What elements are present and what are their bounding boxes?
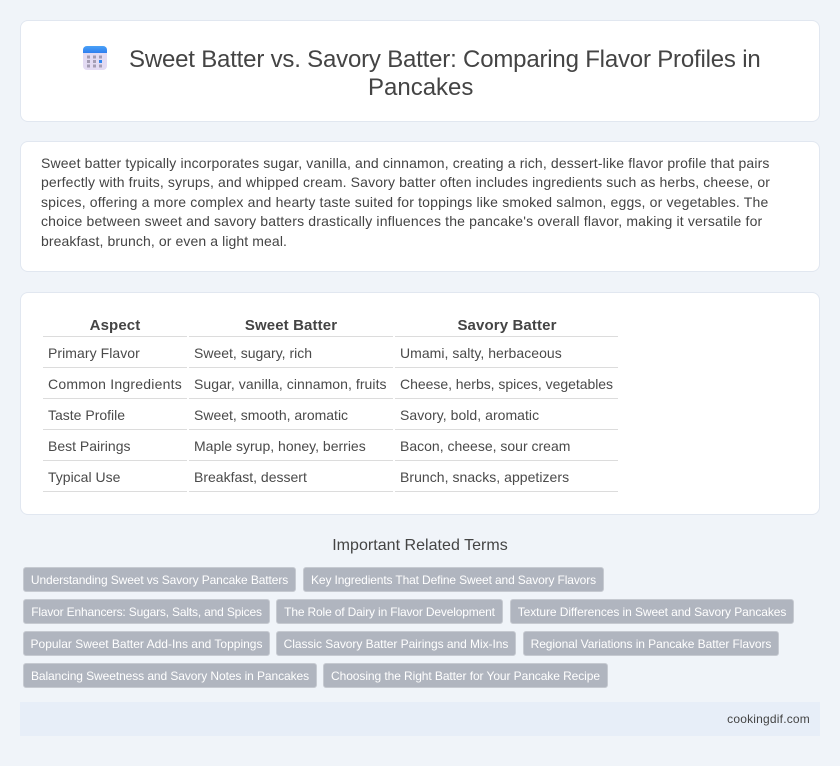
text block: description: breakfast, brunch, or even a light meal. — [41, 233, 287, 249]
table row: Typical Use: Typical Use — [48, 469, 120, 485]
table row: Common Ingredients: Common Ingredients — [48, 376, 182, 392]
title: Pancakes — [368, 74, 473, 101]
title: Sweet Batter vs. Savory Batter: Comparing Flavor Profiles in — [129, 46, 761, 73]
text block: description: perfectly with fruits, syrups, and whipped cream. Savory batter often includes ingredients such as herbs, cheese, or — [41, 174, 770, 190]
table row: Best Pairings: Best Pairings — [48, 438, 130, 454]
table row: Primary Flavor: Umami, salty, herbaceous — [400, 345, 562, 361]
table row: Common Ingredients — [48, 376, 613, 392]
text block: description: Sweet batter typically incorporates sugar, vanilla, and cinnamon, creating a rich, dessert-like flavor profile that pairs — [41, 155, 770, 171]
table header: Sweet Batter — [245, 317, 337, 334]
table row: Best Pairings: Bacon, cheese, sour cream — [400, 438, 570, 454]
table row: Taste Profile — [48, 407, 539, 423]
text block: description: spices, offering a more complex and hearty taste suited for toppings like smoked salmon, eggs, or vegetables. The — [41, 194, 768, 210]
related terms chips: The Role of Dairy in Flavor Development — [284, 605, 495, 619]
panel: title card — [20, 20, 820, 122]
table row: Typical Use: Breakfast, dessert — [194, 469, 307, 485]
table row: Primary Flavor — [48, 345, 562, 361]
table row: Typical Use — [48, 469, 569, 485]
table header: Savory Batter — [457, 317, 557, 334]
related terms chips: Texture Differences in Sweet and Savory Pancakes — [518, 605, 786, 619]
table row: Typical Use: Brunch, snacks, appetizers — [400, 469, 569, 485]
panel: comparison table — [20, 292, 820, 515]
table header — [90, 317, 557, 334]
text block: description — [41, 155, 770, 249]
related terms chips: Key Ingredients That Define Sweet and Savory Flavors — [311, 573, 596, 587]
table header: Aspect — [90, 317, 140, 334]
related terms chips: Choosing the Right Batter for Your Pancake Recipe — [331, 669, 600, 683]
related terms chips: Regional Variations in Pancake Batter Flavors — [531, 637, 771, 651]
table row: Primary Flavor: Primary Flavor — [48, 345, 140, 361]
table row: Taste Profile: Taste Profile — [48, 407, 125, 423]
text block: description: choice between sweet and savory batters drastically influences the pancake's overall flavor, making it versatile for — [41, 213, 762, 229]
related terms chips: Classic Savory Batter Pairings and Mix-Ins — [284, 637, 508, 651]
footer text: cookingdif.com — [727, 712, 810, 726]
table row: Taste Profile: Savory, bold, aromatic — [400, 407, 539, 423]
icon: calendar — [83, 46, 107, 70]
table row: Best Pairings — [48, 438, 570, 454]
title — [129, 46, 761, 101]
related terms chips — [23, 567, 794, 688]
table row: Best Pairings: Maple syrup, honey, berries — [194, 438, 366, 454]
related terms chips: Flavor Enhancers: Sugars, Salts, and Spices — [31, 605, 262, 619]
related terms chips: Balancing Sweetness and Savory Notes in Pancakes — [31, 669, 309, 683]
table row: Primary Flavor: Sweet, sugary, rich — [194, 345, 312, 361]
heading: related terms: Important Related Terms — [332, 537, 508, 554]
related terms chips: Understanding Sweet vs Savory Pancake Batters — [31, 573, 288, 587]
table row: Common Ingredients: Sugar, vanilla, cinnamon, fruits — [194, 376, 387, 392]
table row: Common Ingredients: Cheese, herbs, spices, vegetables — [400, 376, 613, 392]
footer bar — [20, 702, 820, 736]
table row: Taste Profile: Sweet, smooth, aromatic — [194, 407, 348, 423]
panel: description — [20, 141, 820, 272]
related terms chips: Popular Sweet Batter Add-Ins and Toppings — [31, 637, 262, 651]
